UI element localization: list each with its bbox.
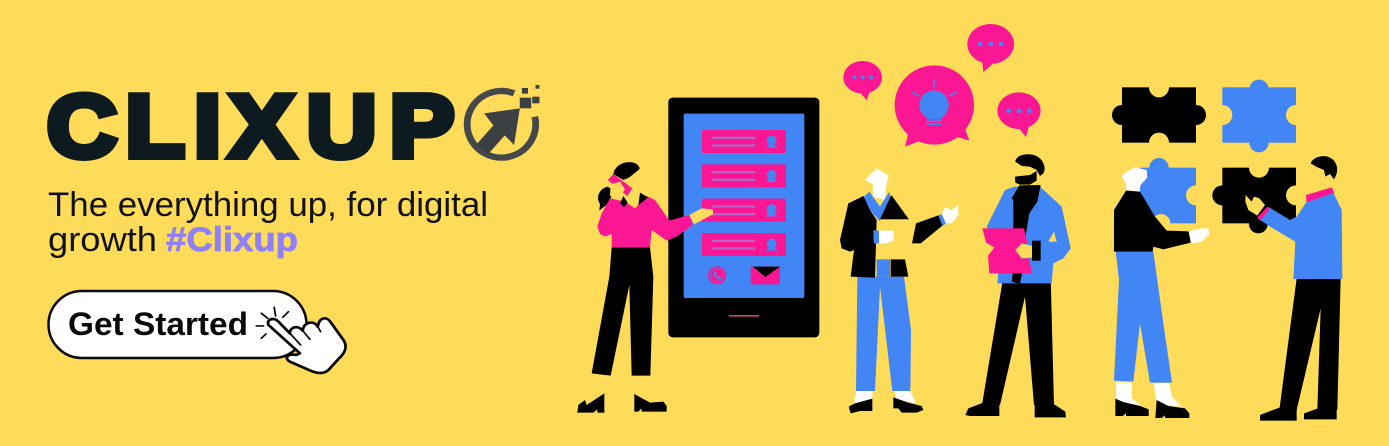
man with tablet xyxy=(840,168,958,413)
tagline: #Clixup xyxy=(166,221,298,259)
tagline: growth xyxy=(48,221,157,259)
illustration: phone and woman xyxy=(577,98,819,413)
bearded man with puzzle piece xyxy=(965,154,1071,417)
man holding puzzle xyxy=(1245,156,1342,421)
puzzle piece black top xyxy=(1112,77,1206,153)
woman xyxy=(577,162,713,413)
phone xyxy=(668,98,819,337)
button: Get Started xyxy=(48,291,306,358)
title: CLIXUP: CLIXUP xyxy=(47,77,454,176)
speech bubble with light bulb xyxy=(895,65,974,147)
icon: Clixup logo xyxy=(467,85,539,158)
illustration: puzzle pieces and two people xyxy=(1112,77,1342,421)
button: Get Started: Get Started xyxy=(68,306,248,342)
speech bubble right xyxy=(997,92,1041,137)
puzzle piece black lower xyxy=(1212,158,1306,233)
speech bubble small left xyxy=(843,61,882,100)
woman holding puzzle xyxy=(1114,167,1209,418)
tagline: The everything up, for digital xyxy=(48,186,488,224)
puzzle piece blue top xyxy=(1212,80,1306,152)
puzzle piece blue lower xyxy=(1140,158,1206,233)
illustration: speech bubbles and two men xyxy=(840,24,1071,417)
icon: pointing hand xyxy=(256,307,346,373)
tagline xyxy=(48,186,488,259)
speech bubble top xyxy=(967,24,1014,72)
